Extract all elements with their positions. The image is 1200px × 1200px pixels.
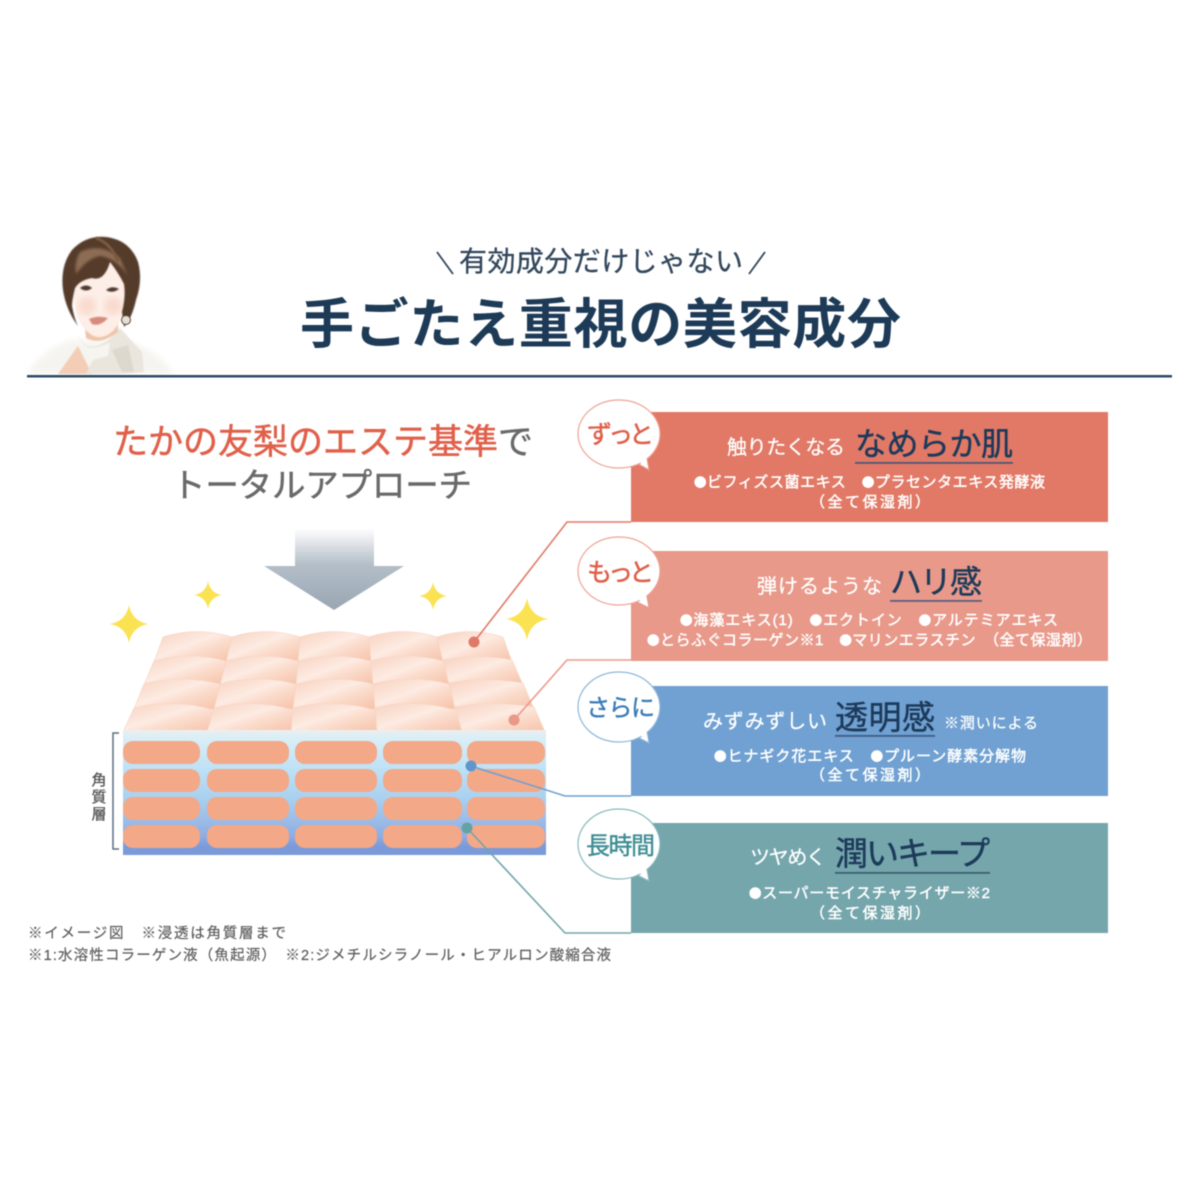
ingredients: ●ビフィズス菌エキス ●プラセンタエキス発酵液 xyxy=(694,472,1045,491)
bubble: motto xyxy=(578,537,660,608)
heading xyxy=(703,699,1038,737)
panel: firmness xyxy=(578,537,1108,661)
leader line: smooth skin xyxy=(468,522,631,648)
bubble: long lasting: 長時間 xyxy=(586,833,655,860)
heading: ツヤめく xyxy=(750,847,826,869)
bubble: zutto: ずっと xyxy=(587,421,654,449)
panel: smooth skin xyxy=(578,400,1108,522)
heading: 弾けるような xyxy=(757,575,882,598)
label: stratum corneum: 質 xyxy=(91,788,107,806)
footnotes xyxy=(28,924,612,964)
footnotes: ※イメージ図 ※浸透は角質層まで xyxy=(28,924,286,942)
heading: 触りたくなる xyxy=(727,436,845,459)
ingredients: ●ヒナギク花エキス ●プルーン酵素分解物 xyxy=(714,746,1026,765)
ingredients: （全て保湿剤） xyxy=(810,767,930,784)
ingredients xyxy=(694,472,1045,511)
left heading: たかの友梨のエステ基準で xyxy=(113,423,533,462)
panel: clarity xyxy=(578,672,1108,796)
bubble: zutto xyxy=(578,400,660,470)
leader line: moisture xyxy=(462,822,631,933)
ingredients: ●とらふぐコラーゲン※1 ●マリンエラスチン （全て保湿剤） xyxy=(647,630,1092,649)
bracket: stratum corneum xyxy=(113,733,119,849)
ingredients: ●スーパーモイスチャライザー※2 xyxy=(749,883,990,902)
portrait photo xyxy=(28,237,174,374)
moisture layer xyxy=(123,730,546,855)
bubble: long lasting xyxy=(578,809,660,881)
heading xyxy=(757,564,982,602)
ingredients: （全て保湿剤） xyxy=(810,494,930,511)
skin illustration xyxy=(123,632,546,855)
heading: ※潤いによる xyxy=(944,715,1038,732)
panel: moisture xyxy=(578,809,1108,933)
heading xyxy=(727,426,1013,464)
heading: 透明感 xyxy=(835,699,935,736)
subtitle: 有効成分だけじゃない xyxy=(459,246,743,277)
cells xyxy=(123,741,545,848)
skin surface xyxy=(123,632,545,732)
heading: 潤いキープ xyxy=(835,835,990,872)
ingredients: （全て保湿剤） xyxy=(810,905,930,922)
sparkles xyxy=(110,581,548,643)
label: stratum corneum: 層 xyxy=(91,806,107,823)
bubble: motto: もっと xyxy=(587,559,654,587)
label: stratum corneum: 角 xyxy=(91,772,107,789)
left heading xyxy=(113,423,533,505)
title: 手ごたえ重視の美容成分 xyxy=(300,295,901,355)
bubble: sarani: さらに xyxy=(586,695,655,722)
bubble: sarani xyxy=(578,672,660,743)
ingredients: ●海藻エキス(1) ●エクトイン ●アルテミアエキス xyxy=(680,610,1058,629)
arrow xyxy=(264,528,404,610)
heading: ハリ感 xyxy=(890,564,982,600)
ingredients xyxy=(749,883,990,922)
footnotes: ※1:水溶性コラーゲン液（魚起源） ※2:ジメチルシラノール・ヒアルロン酸縮合液 xyxy=(28,947,612,964)
heading: なめらか肌 xyxy=(855,426,1013,462)
label: stratum corneum xyxy=(91,772,107,823)
heading: みずみずしい xyxy=(703,710,827,733)
ingredients xyxy=(714,746,1026,784)
left heading: トータルアプローチ xyxy=(172,468,472,505)
leader line: clarity xyxy=(466,760,631,796)
ingredients xyxy=(647,610,1092,649)
leader line: firmness xyxy=(508,660,631,726)
heading xyxy=(750,835,990,874)
